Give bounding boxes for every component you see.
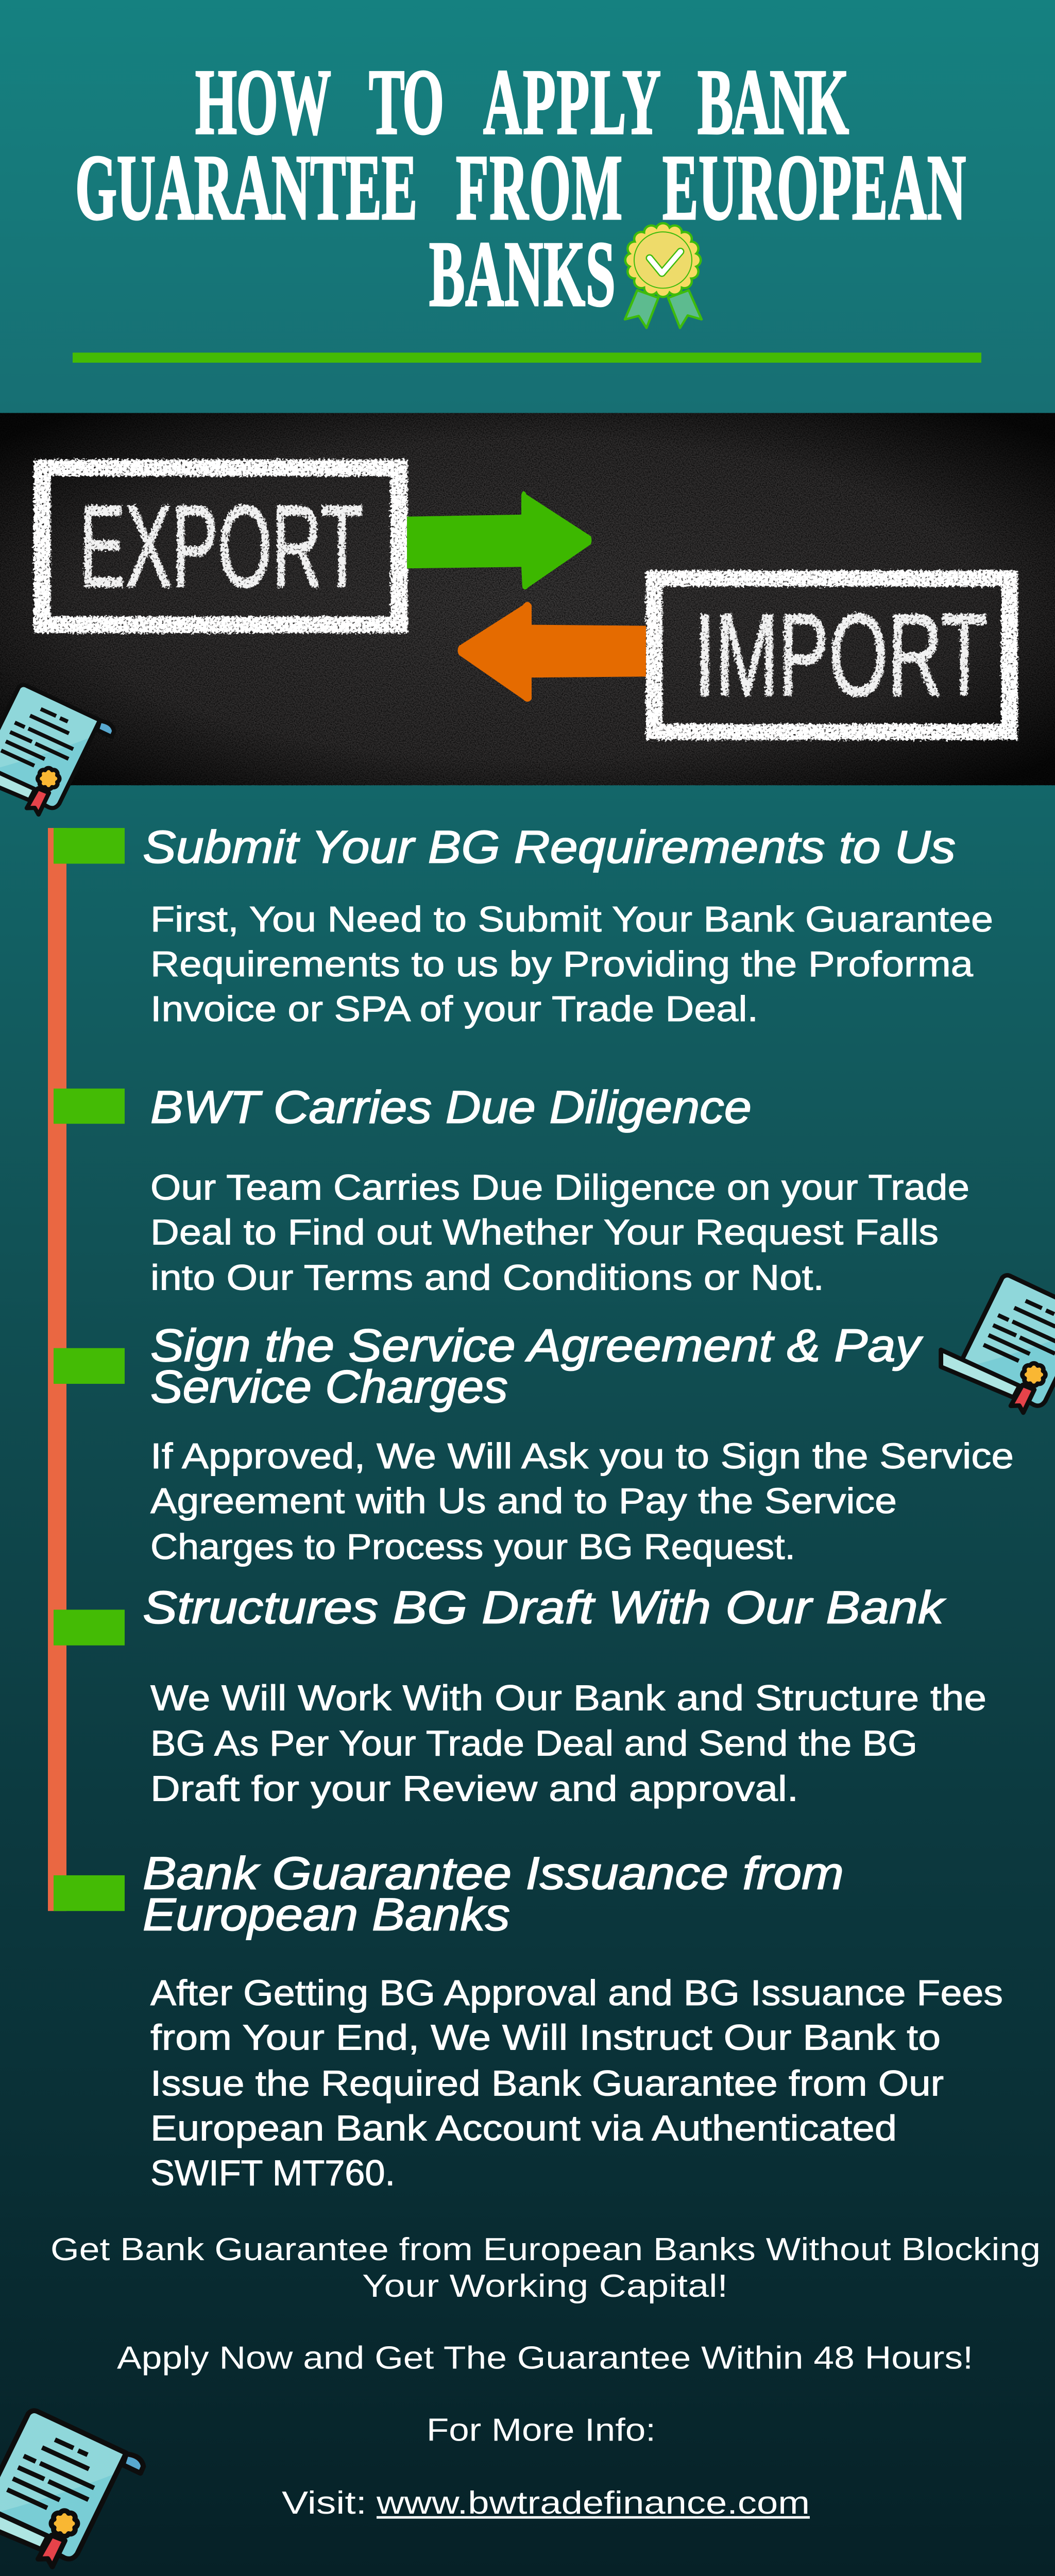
footer call to action: Get Bank Guarantee from European Banks Without Blocking — [50, 2232, 1041, 2267]
step 5 — [54, 1848, 1003, 2193]
step 2 — [54, 1082, 969, 1297]
title: BANKS — [429, 223, 616, 326]
step 2 body — [150, 1167, 969, 1297]
title: HOW — [195, 50, 331, 154]
step 3 heading: Sign the Service Agreement & Pay — [150, 1320, 923, 1371]
step 1 body: Invoice or SPA of your Trade Deal. — [150, 989, 758, 1029]
step 2 marker — [54, 1089, 125, 1124]
step 5 body: SWIFT MT760. — [150, 2153, 395, 2193]
step 2 heading: BWT Carries Due Diligence — [150, 1082, 752, 1133]
title — [75, 50, 966, 326]
step 1 body: First, You Need to Submit Your Bank Guarantee — [150, 899, 993, 939]
export chalk box: EXPORT — [79, 481, 363, 612]
step 5 body: European Bank Account via Authenticated — [150, 2108, 897, 2148]
website line: www.bwtradefinance.com — [376, 2485, 810, 2521]
step 5 marker — [54, 1875, 125, 1911]
step 5 body: Issue the Required Bank Guarantee from Our — [150, 2063, 944, 2103]
step 2 body: Our Team Carries Due Diligence on your Trade — [150, 1167, 969, 1207]
step 1 body: Requirements to us by Providing the Proforma — [150, 944, 974, 984]
step 2 body: into Our Terms and Conditions or Not. — [150, 1257, 824, 1297]
icon: right certificate scroll — [941, 1275, 1055, 1413]
step 3 marker — [54, 1348, 125, 1384]
step 3 body: Agreement with Us and to Pay the Service — [150, 1481, 897, 1521]
step 5 body: from Your End, We Will Instruct Our Bank to — [150, 2017, 941, 2058]
step 1 marker — [54, 828, 125, 863]
step 4 marker — [54, 1609, 125, 1646]
apply now line: Apply Now and Get The Guarantee Within 48 Hours! — [117, 2340, 973, 2376]
title: GUARANTEE — [75, 136, 417, 240]
export chalk box — [42, 468, 399, 625]
step 5 heading: European Banks — [143, 1889, 510, 1940]
icon: top left certificate scroll — [0, 685, 114, 815]
step 4 body: We Will Work With Our Bank and Structure the — [150, 1677, 986, 1718]
step 2 body: Deal to Find out Whether Your Request Falls — [150, 1212, 939, 1252]
step 3 heading: Service Charges — [150, 1362, 508, 1413]
step 1 body — [150, 899, 993, 1029]
footer call to action — [50, 2232, 1041, 2304]
step 5 heading — [143, 1848, 844, 1940]
arrow: green export arrow — [407, 491, 591, 589]
step 4 body: BG As Per Your Trade Deal and Send the BG — [150, 1723, 917, 1763]
more info line: For More Info: — [427, 2412, 656, 2448]
icon: award rosette with check mark — [625, 223, 702, 328]
timeline vertical bar — [48, 828, 66, 1911]
website line: Visit: — [282, 2485, 367, 2521]
title: APPLY — [483, 50, 661, 154]
title: TO — [369, 50, 444, 154]
icon: bottom left certificate scroll — [0, 2411, 143, 2567]
step 1 heading: Submit Your BG Requirements to Us — [143, 822, 956, 873]
step 5 heading: Bank Guarantee Issuance from — [143, 1848, 844, 1899]
step 4 heading: Structures BG Draft With Our Bank — [143, 1583, 946, 1634]
title underline bar — [73, 352, 981, 363]
step 3 body: Charges to Process your BG Request. — [150, 1527, 795, 1567]
step 5 body — [150, 1973, 1003, 2193]
step 3 body — [150, 1436, 1014, 1567]
footer call to action: Your Working Capital! — [362, 2268, 728, 2304]
step 3 — [54, 1320, 1014, 1567]
step 3 heading — [150, 1320, 923, 1413]
step 5 body: After Getting BG Approval and BG Issuance Fees — [150, 1973, 1003, 2013]
panel: export import chalkboard photo — [0, 413, 1055, 785]
step 4 — [54, 1583, 986, 1808]
title: BANK — [697, 50, 849, 154]
step 3 body: If Approved, We Will Ask you to Sign the Service — [150, 1436, 1014, 1476]
title: FROM — [456, 136, 622, 240]
arrow: orange import arrow — [457, 602, 646, 702]
title: EUROPEAN — [662, 136, 966, 240]
import chalk box — [654, 579, 1010, 732]
step 1 — [54, 822, 993, 1029]
step 4 body: Draft for your Review and approval. — [150, 1768, 798, 1808]
step 4 body — [150, 1677, 986, 1808]
